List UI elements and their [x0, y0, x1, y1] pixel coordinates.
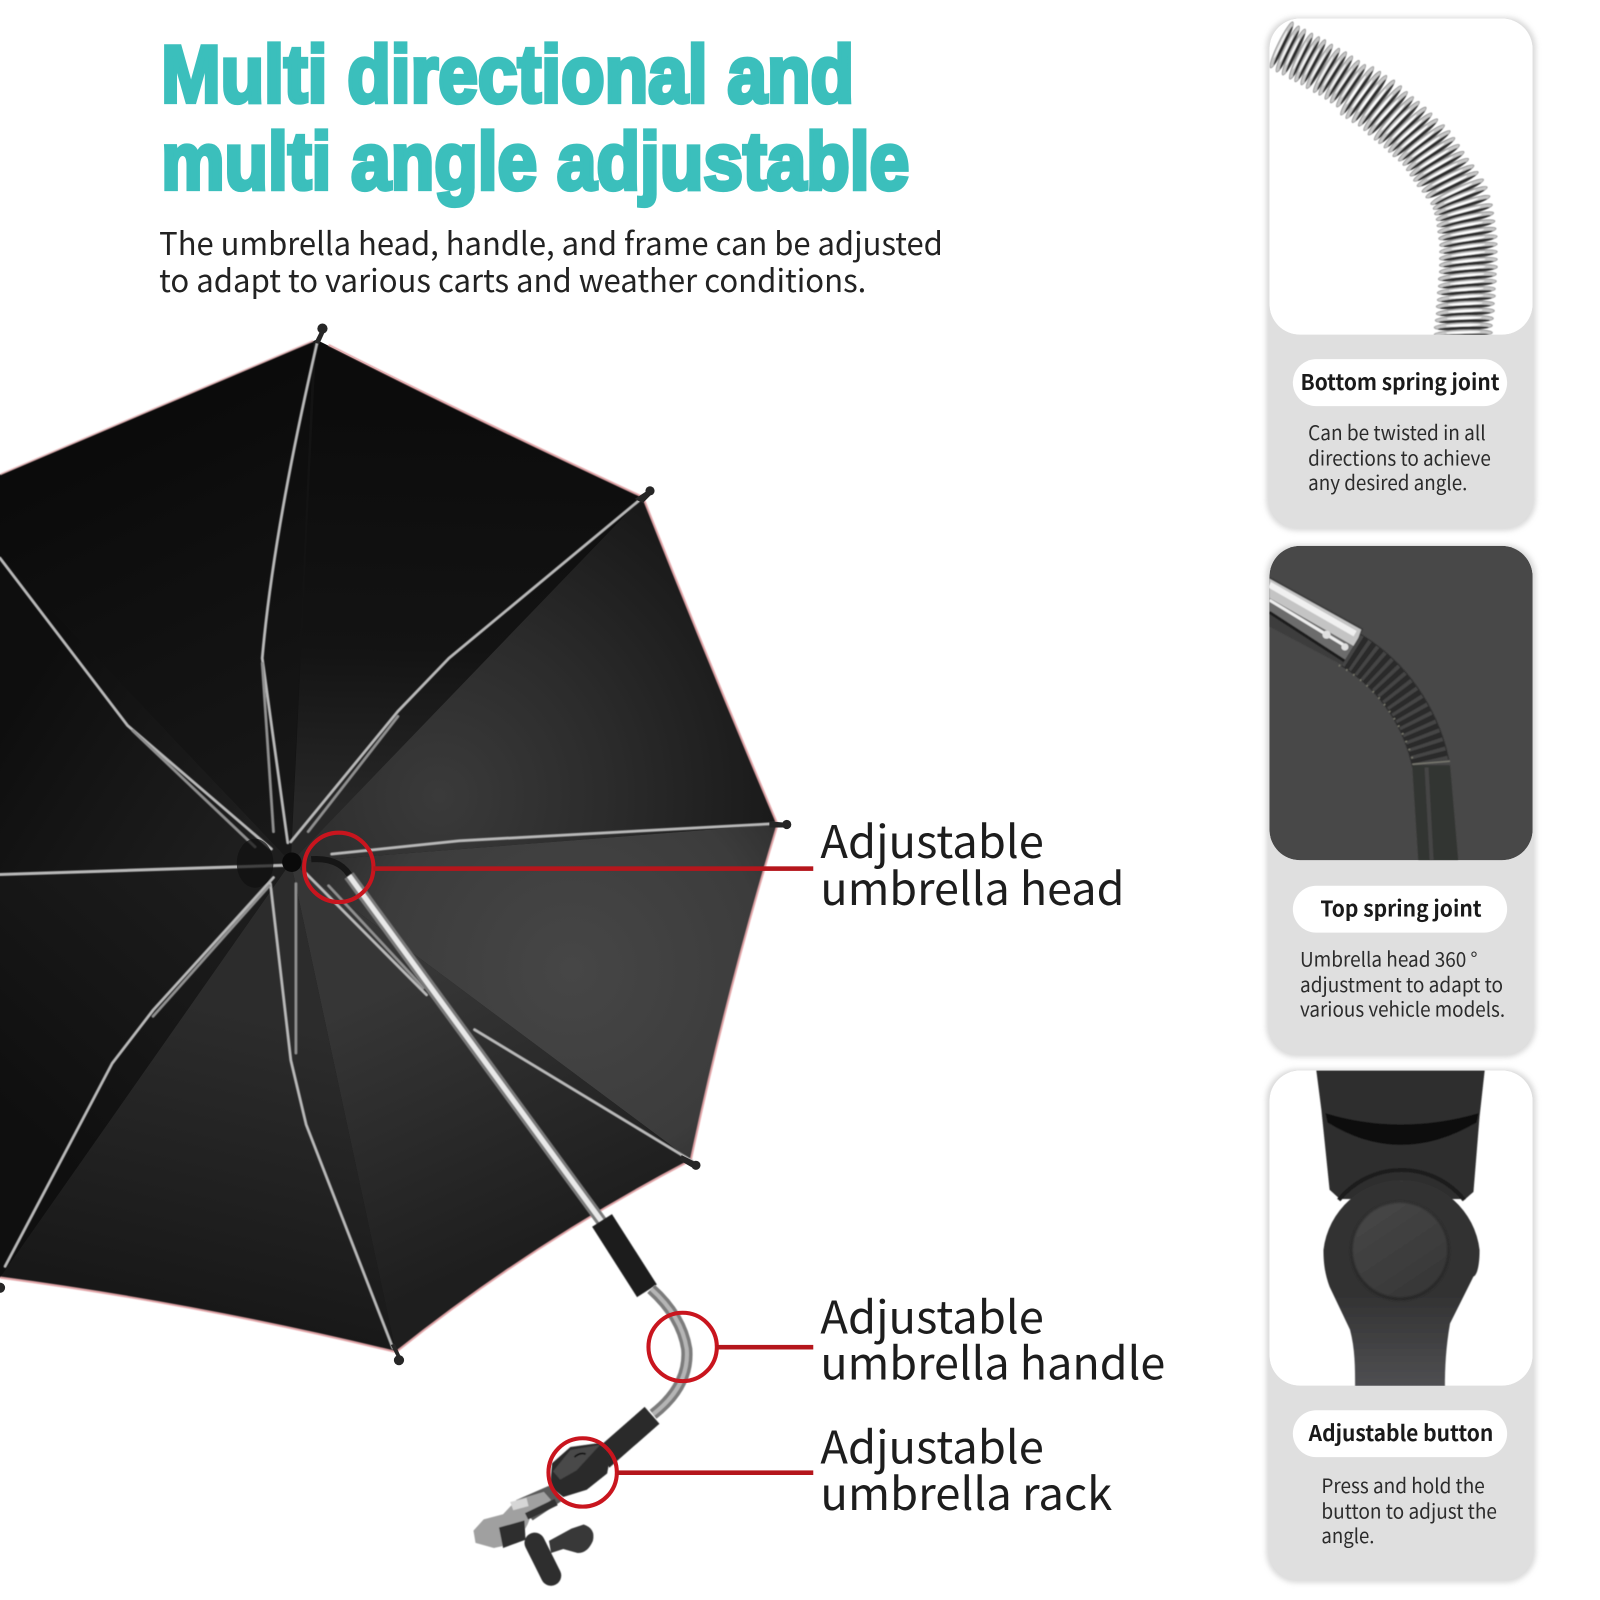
- umbrella ribs: [0, 342, 778, 1348]
- callout: adjustable umbrella rack: Adjustable: [820, 1411, 1044, 1476]
- callout: adjustable umbrella rack: umbrella rack: [820, 1458, 1112, 1523]
- callout: adjustable umbrella rack: [548, 1411, 1112, 1523]
- title: [161, 30, 909, 207]
- description: any desired angle.: [1308, 467, 1467, 496]
- lower black sleeve: [602, 1415, 652, 1459]
- description: Umbrella head 360 °: [1300, 943, 1478, 972]
- umbrella illustration: [0, 323, 791, 1576]
- description: various vehicle models.: [1300, 993, 1505, 1022]
- title: Multi directional and: [161, 30, 854, 120]
- umbrella pole: [349, 876, 606, 1228]
- label pill: [1293, 359, 1507, 406]
- rib tips: [0, 323, 791, 1365]
- description: [1300, 943, 1505, 1022]
- panel: bottom spring joint: [1266, 17, 1536, 531]
- photo: metal spring: [1267, 18, 1533, 339]
- description: [1308, 417, 1491, 496]
- flexible gooseneck handle: [651, 1289, 687, 1414]
- description: Can be twisted in all: [1308, 417, 1486, 446]
- upper black sleeve: [602, 1220, 647, 1291]
- photo: black bellows joint: [1269, 546, 1533, 860]
- label pill: [1293, 1410, 1507, 1457]
- umbrella rack clamp: [473, 1443, 610, 1576]
- label pill: Adjustable button: [1308, 1417, 1493, 1448]
- callout: adjustable umbrella head: Adjustable: [820, 806, 1044, 871]
- callout: adjustable umbrella handle: Adjustable: [820, 1282, 1044, 1347]
- label pill: Top spring joint: [1320, 892, 1482, 923]
- description: angle.: [1321, 1520, 1374, 1549]
- callout: adjustable umbrella handle: [648, 1282, 1165, 1393]
- panel: adjustable button: [1266, 1069, 1536, 1583]
- label pill: Bottom spring joint: [1301, 366, 1499, 397]
- subtitle text: [159, 219, 943, 302]
- umbrella canopy: [0, 340, 778, 1352]
- callout: adjustable umbrella head: umbrella head: [820, 853, 1124, 918]
- umbrella hub: [237, 839, 352, 888]
- label pill: [1293, 886, 1507, 933]
- description: adjustment to adapt to: [1300, 969, 1503, 998]
- subtitle text: to adapt to various carts and weather conditions.: [159, 256, 866, 302]
- description: directions to achieve: [1308, 442, 1491, 471]
- photo: pivot button: [1269, 1070, 1533, 1388]
- panel: top spring joint: [1266, 545, 1536, 1057]
- description: [1321, 1470, 1497, 1549]
- subtitle text: The umbrella head, handle, and frame can be adjusted: [159, 219, 943, 265]
- description: button to adjust the: [1321, 1495, 1497, 1524]
- description: Press and hold the: [1321, 1470, 1485, 1499]
- callout: adjustable umbrella handle: umbrella handle: [820, 1328, 1165, 1393]
- callout: adjustable umbrella head: [304, 806, 1124, 918]
- title: multi angle adjustable: [161, 117, 909, 207]
